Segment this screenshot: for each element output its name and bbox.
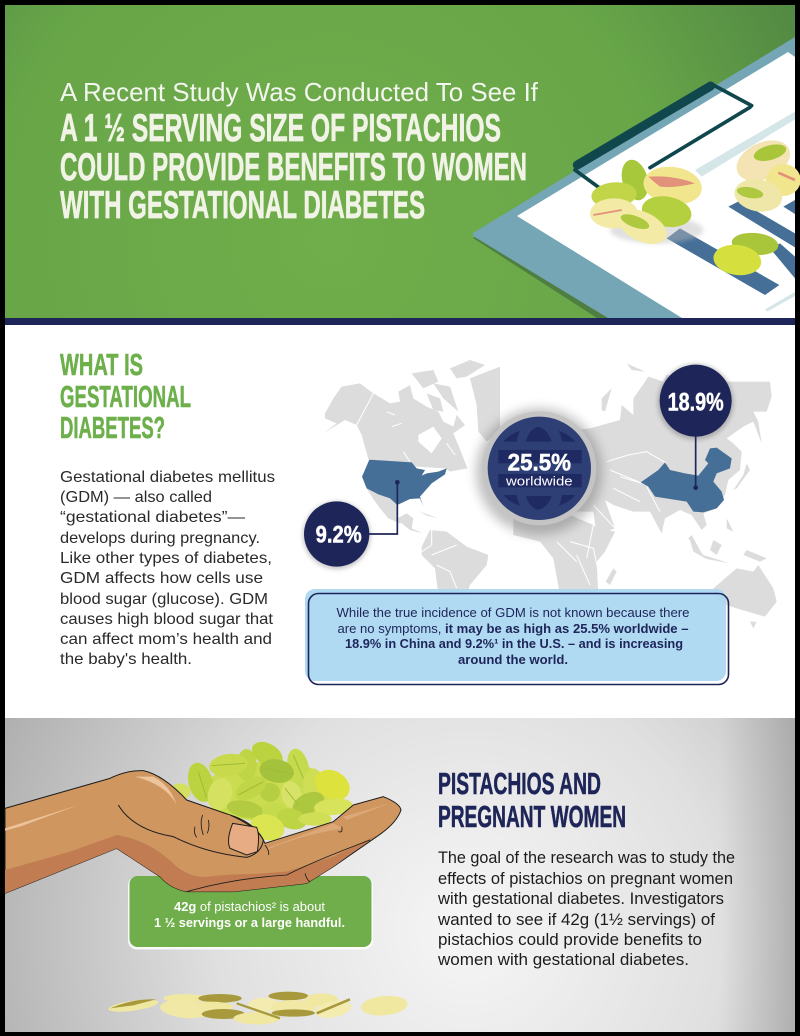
panel: header bbox=[5, 5, 800, 318]
China callout 18.9%: 18.9% bbox=[668, 388, 724, 416]
body text bbox=[437, 849, 735, 969]
panel: pistachios and pregnant women bbox=[5, 718, 795, 1032]
body text bbox=[60, 469, 275, 668]
Hudson Bay bbox=[418, 427, 442, 453]
worldwide badge: 25.5% bbox=[508, 450, 571, 477]
heading: PREGNANT WOMEN bbox=[438, 799, 626, 834]
title: A 1 ½ SERVING SIZE OF PISTACHIOS bbox=[60, 107, 501, 150]
pistachio cluster lower bbox=[711, 231, 779, 278]
heading: PISTACHIOS AND bbox=[438, 766, 601, 801]
illustration: hand bbox=[5, 771, 401, 893]
illustration: pistachio shells bbox=[108, 992, 408, 1024]
world map bbox=[303, 360, 777, 628]
China callout 18.9% bbox=[658, 364, 734, 490]
callout: incidence: 18.9% in China and 9.2%¹ in the U.S. – and is increasing bbox=[345, 636, 683, 651]
title: WITH GESTATIONAL DIABETES bbox=[60, 184, 425, 227]
callout: incidence: around the world. bbox=[458, 652, 568, 667]
body text: with gestational diabetes. Investigators bbox=[437, 890, 724, 908]
body text: “gestational diabetes”— bbox=[60, 509, 245, 526]
divider band bbox=[5, 318, 795, 325]
body text: develops during pregnancy. bbox=[60, 530, 260, 547]
body text: pistachios could provide benefits to bbox=[438, 931, 702, 949]
USA callout 9.2%: 9.2% bbox=[316, 521, 362, 548]
pistachio cluster right bbox=[730, 132, 800, 215]
body text: The goal of the research was to study the bbox=[438, 849, 735, 867]
worldwide badge: worldwide bbox=[505, 474, 573, 489]
callout: incidence: While the true incidence of GDM is not known because there bbox=[336, 605, 690, 620]
heading: GESTATIONAL bbox=[60, 379, 191, 414]
USA highlight bbox=[362, 460, 447, 507]
Americas bbox=[323, 360, 500, 595]
body text: Like other types of diabetes, bbox=[60, 550, 272, 567]
body text: women with gestational diabetes. bbox=[437, 951, 689, 969]
body text: GDM affects how cells use bbox=[60, 570, 263, 587]
title: A Recent Study Was Conducted To See If bbox=[60, 77, 539, 107]
title: COULD PROVIDE BENEFITS TO WOMEN bbox=[60, 146, 527, 189]
heading: DIABETES? bbox=[60, 410, 165, 445]
callout: serving size bbox=[128, 876, 373, 950]
panel: what is gestational diabetes bbox=[5, 325, 795, 718]
thumbnail bbox=[228, 823, 259, 855]
Eurasia, Africa and Oceania bbox=[513, 363, 777, 628]
heading: WHAT IS bbox=[60, 347, 143, 382]
body text: blood sugar (glucose). GDM bbox=[60, 591, 268, 608]
USA callout 9.2% bbox=[303, 480, 400, 569]
body text: Gestational diabetes mellitus bbox=[60, 469, 275, 486]
callout: incidence: are no symptoms, it may be as high as 25.5% worldwide – bbox=[338, 621, 688, 636]
body text: (GDM) — also called bbox=[60, 489, 212, 506]
China highlight bbox=[641, 448, 732, 512]
body text: wanted to see if 42g (1½ servings) of bbox=[437, 911, 715, 929]
callout: incidence bbox=[305, 589, 728, 684]
body text: causes high blood sugar that bbox=[60, 611, 274, 628]
pistachio pile bbox=[169, 737, 355, 844]
body text: effects of pistachios on pregnant women bbox=[438, 870, 733, 888]
clipboard illustration bbox=[473, 37, 800, 318]
body text: the baby's health. bbox=[60, 651, 192, 668]
worldwide badge bbox=[476, 408, 603, 535]
heading bbox=[438, 766, 626, 834]
callout: serving size: 1 ½ servings or a large handful. bbox=[154, 915, 345, 930]
title bbox=[60, 77, 539, 227]
callout: serving size: 42g of pistachios² is about bbox=[174, 899, 325, 914]
heading bbox=[60, 347, 191, 445]
body text: can affect mom’s health and bbox=[60, 631, 272, 648]
pistachio cluster left bbox=[590, 157, 704, 251]
